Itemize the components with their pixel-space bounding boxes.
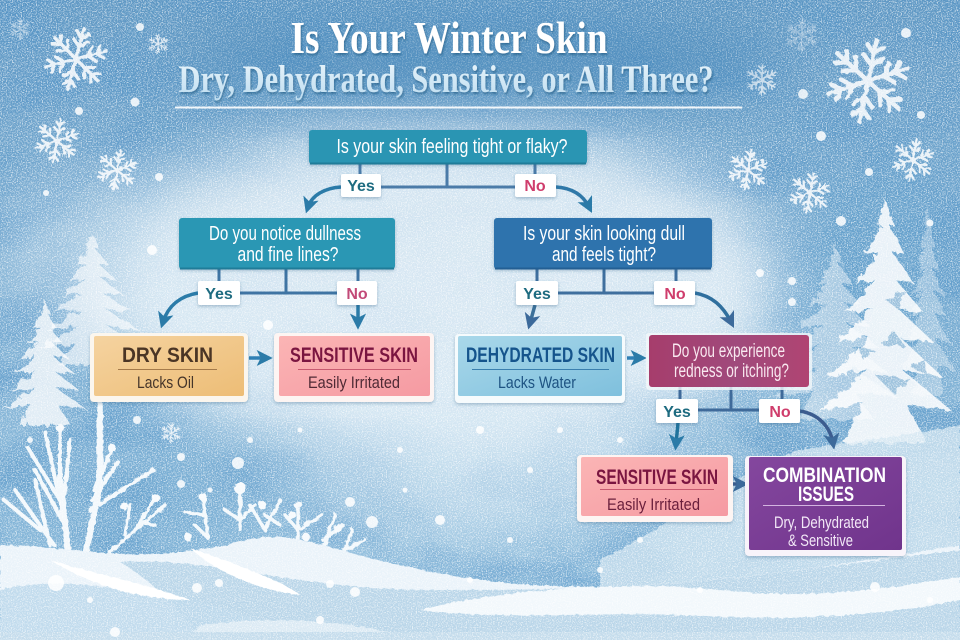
result: dry skin: DRY SKIN (122, 344, 213, 367)
arrow: sensitive to combination (733, 482, 742, 486)
label: no 4: No (769, 404, 791, 421)
result: dehydrated skin: Lacks Water (498, 373, 576, 392)
result: sensitive skin 2: Easily Irritated (607, 495, 700, 514)
question 4 box: Do you experience (672, 341, 785, 362)
arrow: no to combination (800, 411, 833, 443)
connector tree: question 4 (680, 385, 782, 410)
result: sensitive skin 2: SENSITIVE SKIN (596, 466, 718, 489)
arrow: dehydrated to question 4 (627, 356, 640, 360)
arrow: yes to sensitive skin 2 (676, 423, 678, 444)
question 3 box (494, 218, 712, 269)
question 4 box: redness or itching? (674, 361, 789, 382)
connector tree: question 3 (537, 265, 676, 293)
label: yes 1 (341, 174, 381, 197)
question 2 box: Do you notice dullness (209, 223, 361, 245)
label: yes 3: Yes (523, 286, 551, 303)
arrow: yes to dry skin (163, 293, 198, 322)
label: yes 3 (516, 281, 558, 305)
question 3 box: and feels tight? (552, 244, 656, 266)
result: sensitive skin (274, 333, 434, 402)
result: combination issues: Dry, Dehydrated (774, 513, 869, 532)
result: combination issues: ISSUES (798, 483, 854, 506)
title (178, 12, 714, 101)
label: no 2 (337, 281, 377, 305)
arrow: no to sensitive skin (356, 304, 360, 323)
evergreen trees left (4, 235, 148, 425)
question 1 box (309, 130, 587, 164)
connector tree: question 1 (360, 160, 535, 187)
title line 2: Dry, Dehydrated, Sensitive, or All Three? (178, 58, 714, 101)
question 2 box (179, 218, 395, 269)
result: sensitive skin: Easily Irritated (308, 373, 400, 392)
label: no 3: No (664, 286, 686, 303)
frosted branches (4, 405, 365, 556)
title line 1: Is Your Winter Skin (290, 12, 608, 63)
result: dehydrated skin (455, 334, 625, 403)
arrow: yes to question 2 (308, 187, 341, 207)
title underline (175, 106, 742, 108)
snowflakes (10, 18, 937, 443)
title backdrop wash (170, 20, 790, 104)
question 4 box (646, 333, 812, 390)
label: no 4 (759, 399, 800, 423)
arrow: no to question 3 (556, 187, 589, 207)
result: combination issues (745, 456, 906, 556)
result: dry skin: Lacks Oil (137, 373, 194, 392)
result: sensitive skin 2 (577, 455, 733, 522)
result: combination issues: COMBINATION (763, 464, 886, 487)
label: yes 1: Yes (347, 178, 375, 195)
label: yes 2 (198, 281, 240, 305)
label: no 1: No (524, 178, 546, 195)
result: sensitive skin: SENSITIVE SKIN (290, 344, 418, 367)
label: yes 2: Yes (205, 286, 233, 303)
snow hills (0, 425, 960, 636)
label: no 2: No (346, 286, 368, 303)
question 2 box: and fine lines? (238, 244, 338, 266)
label: no 1 (515, 174, 556, 197)
evergreen trees right (773, 198, 955, 443)
arrow: yes to dehydrated skin (530, 305, 535, 323)
result: dry skin (90, 333, 248, 402)
label: yes 4: Yes (663, 404, 691, 421)
snow floor strip (0, 632, 960, 640)
question 1 box: Is your skin feeling tight or flaky? (336, 136, 568, 158)
question 3 box: Is your skin looking dull (523, 223, 685, 245)
result: dehydrated skin: DEHYDRATED SKIN (466, 344, 615, 367)
arrow: dry to sensitive (249, 356, 266, 360)
label: no 3 (654, 281, 695, 305)
arrow: no to question 4 (695, 293, 731, 322)
connector tree: question 2 (219, 265, 358, 293)
label: yes 4 (656, 399, 698, 423)
result: combination issues: & Sensitive (788, 531, 853, 550)
